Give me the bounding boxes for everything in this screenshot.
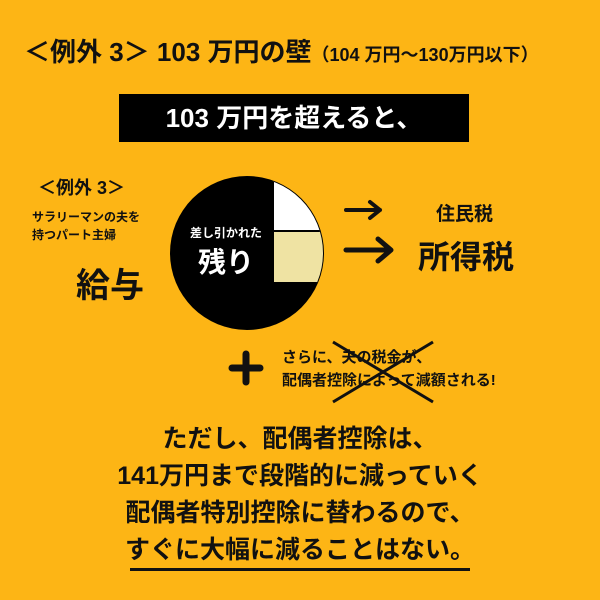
conclusion text: ただし、配偶者控除は、 <box>162 425 438 453</box>
note text: さらに、夫の税金が、 <box>282 349 431 366</box>
label: ＜例外 3＞ <box>38 178 125 198</box>
note text: 配偶者控除によって減額される! <box>282 372 496 389</box>
left text block <box>32 178 144 305</box>
heading box: 103 万円を超えると、 <box>166 103 422 133</box>
heading box <box>119 94 469 142</box>
resident tax: 住民税 <box>436 204 493 225</box>
note text <box>282 349 496 389</box>
cross <box>332 340 434 404</box>
conclusion text: 配偶者特別控除に替わるので、 <box>125 499 474 527</box>
plus icon <box>228 350 264 386</box>
conclusion text: すぐに大幅に減ることはない。 <box>125 536 475 564</box>
salary label: 給与 <box>76 267 144 305</box>
subtitle <box>32 210 140 242</box>
pie chart <box>170 176 324 330</box>
subtitle: 持つパート主婦 <box>32 228 116 242</box>
pie chart: 差し引かれた <box>190 225 262 240</box>
conclusion text: 141万円まで段階的に減っていく <box>117 462 483 490</box>
arrows <box>344 200 394 264</box>
conclusion text <box>117 425 483 564</box>
plus note <box>228 340 496 404</box>
underline <box>130 568 470 571</box>
income tax: 所得税 <box>418 239 514 275</box>
title: ＜例外 3＞ 103 万円の壁（104 万円～130万円以下） <box>24 37 539 67</box>
pie chart: 残り <box>198 247 254 278</box>
subtitle: サラリーマンの夫を <box>32 210 140 224</box>
